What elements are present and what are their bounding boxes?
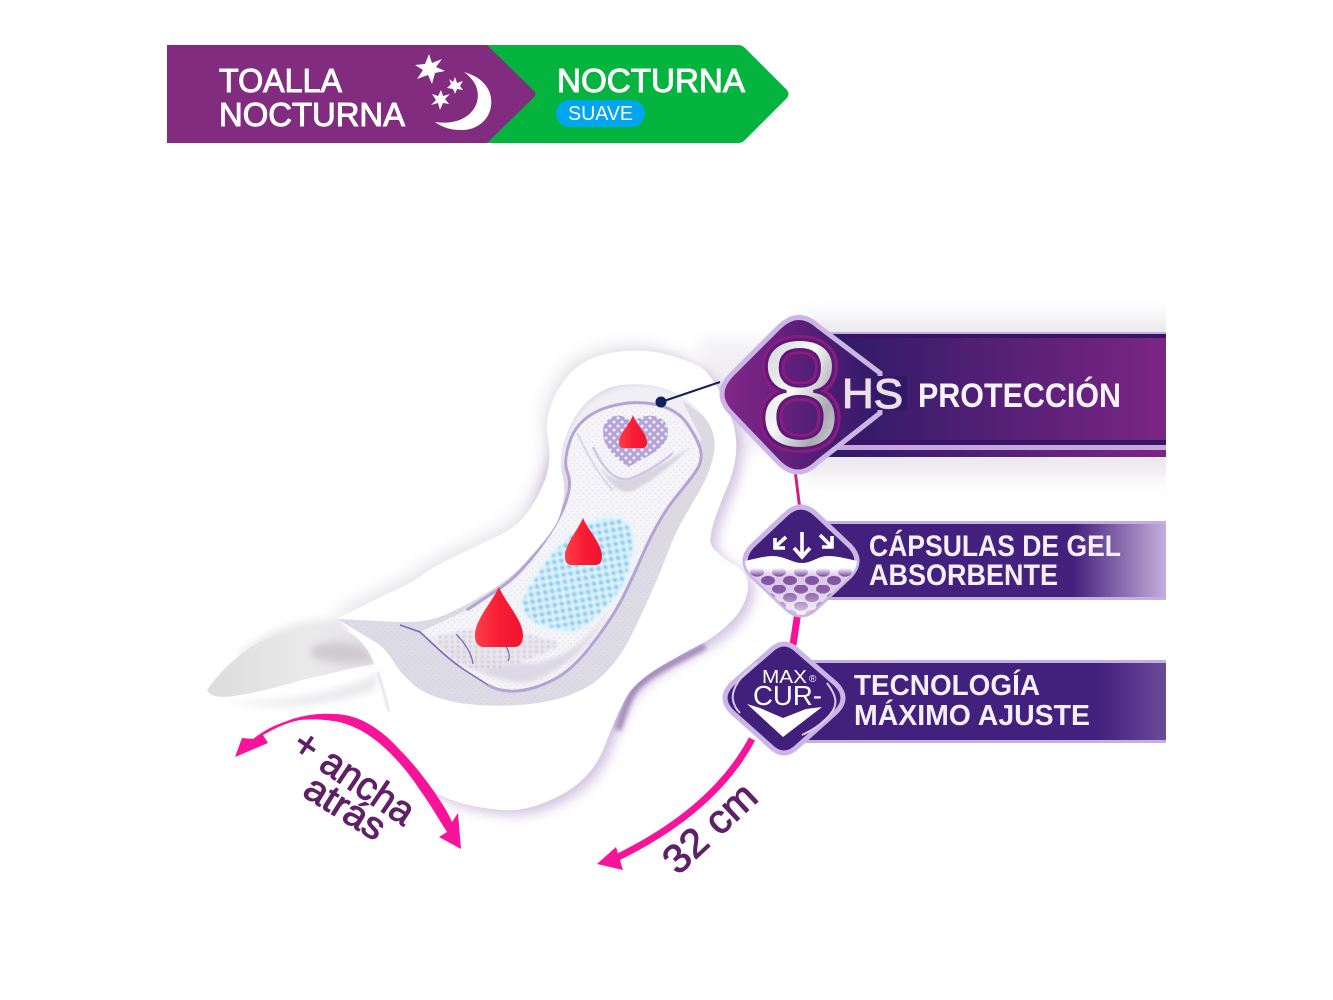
text: capsulas: [869, 529, 1121, 592]
header badge: [167, 45, 788, 143]
pad purple shadow: [432, 356, 754, 815]
left wing: [207, 629, 374, 697]
callout: 8 hs proteccion: [722, 308, 1166, 480]
blue gel zone: [520, 517, 634, 632]
heading: toalla nocturna: [219, 62, 405, 133]
dark purple fold line: [400, 625, 488, 685]
purple edge line: [467, 403, 701, 691]
icon: max cur logo: CUR-: [753, 680, 822, 711]
wing crease shadow: [310, 642, 372, 663]
pill: suave: SUAVE: [568, 103, 633, 125]
fine crease lines: [456, 634, 509, 664]
banner: [810, 521, 1166, 600]
red drop lower: [475, 587, 523, 647]
pad edge line: [378, 672, 389, 712]
callout: tecnologia maximo ajuste: [725, 644, 1166, 753]
text: proteccion: PROTECCIÓN: [918, 377, 1121, 415]
connector line: [793, 470, 800, 645]
icon: max cur logo: ®: [809, 674, 817, 685]
product: sanitary pad: [207, 346, 754, 815]
top fade of core: [561, 384, 702, 466]
lower mesh zone: [437, 630, 560, 670]
label: + ancha atrás: atrás: [296, 767, 393, 849]
pointer line to protection zone: [656, 382, 720, 408]
callout: capsulas de gel: [740, 507, 1166, 621]
text: tecnologia: TECNOLOGÍA: [854, 668, 1040, 702]
hs: HS: [842, 370, 903, 417]
cup line: [593, 447, 673, 479]
honeycomb: [746, 566, 856, 614]
diamond: [725, 644, 843, 753]
numeral 8: 8: [757, 308, 843, 480]
badge: purple toalla nocturna: [167, 45, 536, 143]
lower grey inside line: [432, 620, 604, 684]
pad grey shadow: [332, 346, 692, 645]
heading: toalla nocturna: NOCTURNA: [219, 96, 405, 133]
inner quilted area: [420, 403, 701, 691]
soft shadows behind callouts: [700, 318, 1200, 476]
red drop middle: [565, 518, 602, 565]
right grey bulge: [679, 400, 714, 526]
wave band: [745, 556, 857, 576]
text: tecnologia: [854, 668, 1090, 732]
numeral 8: 8: [757, 308, 843, 480]
arrow: wider back: [235, 714, 461, 849]
pill: suave: [556, 100, 645, 127]
label: nocturna: NOCTURNA: [557, 62, 745, 99]
cup shading: [600, 447, 690, 492]
label: + ancha atrás: + ancha: [285, 721, 424, 834]
icon: arrows: [775, 532, 832, 557]
icon: max cur logo: [733, 663, 835, 737]
diamond: [740, 507, 865, 621]
banner: [815, 332, 1166, 457]
icon: max cur logo: MAX: [762, 667, 807, 687]
heart patch: [603, 416, 668, 467]
diamond: [722, 317, 907, 472]
red drop top: [619, 415, 647, 448]
banner: [795, 660, 1166, 743]
arrow: 32 cm: [597, 739, 752, 870]
label: 32 cm: 32 cm: [654, 774, 766, 883]
heading: toalla nocturna: TOALLA: [219, 62, 342, 99]
darker notch shadow: [618, 646, 705, 730]
text: capsulas: ABSORBENTE: [869, 559, 1058, 592]
icon: moon and stars: [415, 54, 491, 130]
absorbent core: [337, 384, 715, 706]
hs: HS: [842, 370, 903, 417]
text: capsulas: CÁPSULAS DE GEL: [869, 529, 1121, 563]
badge: green nocturna suave: [480, 45, 788, 143]
text: tecnologia: MÁXIMO AJUSTE: [854, 698, 1090, 732]
pad body: [337, 351, 748, 810]
wing shadow: [225, 619, 380, 706]
